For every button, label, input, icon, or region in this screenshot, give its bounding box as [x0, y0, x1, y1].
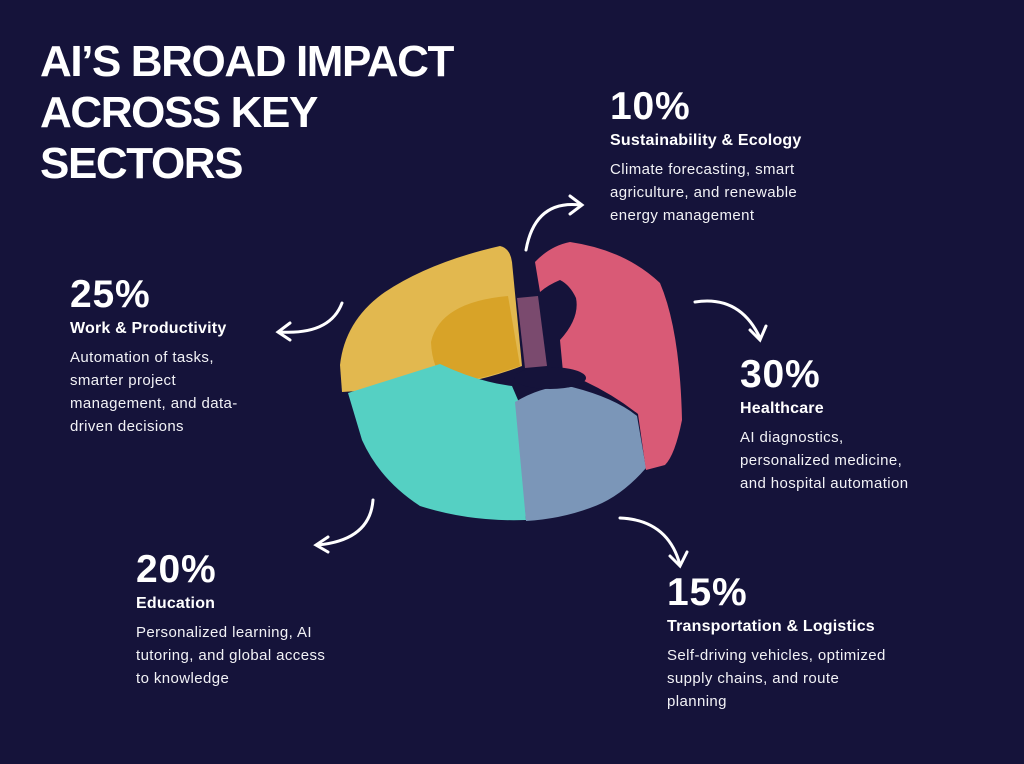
arrow: to healthcare: [695, 301, 766, 340]
block: education: tutoring, and global access: [136, 647, 325, 664]
block: education: Personalized learning, AI: [136, 624, 312, 641]
block: sustainability: Climate forecasting, smart agriculture, and renewable energy management: [610, 161, 797, 224]
title: SECTORS: [40, 139, 242, 188]
block: work: 25%: [70, 273, 150, 316]
arrow: to sustainability: [526, 196, 582, 250]
chart segment: yellow work: [340, 246, 522, 392]
block: education: 20%: [136, 548, 216, 591]
block: sustainability: 10%: [610, 85, 690, 128]
block: education: Education: [136, 595, 215, 612]
block: healthcare: [740, 353, 908, 492]
block: sustainability: Sustainability & Ecology: [610, 132, 802, 149]
chart segment: purple sustainability: [517, 296, 547, 368]
title: [40, 37, 454, 188]
block: healthcare: and hospital automation: [740, 475, 908, 492]
block: healthcare: Healthcare: [740, 400, 824, 417]
block: transport: supply chains, and route: [667, 670, 839, 687]
block: healthcare: AI diagnostics,: [740, 429, 844, 446]
chart segment: teal education: [348, 364, 526, 520]
block: work: management, and data-: [70, 395, 238, 412]
title: ACROSS KEY: [40, 88, 317, 137]
arrow: to transport: [620, 518, 687, 566]
block: work: driven decisions: [70, 418, 184, 435]
block: work: [70, 273, 238, 435]
block: healthcare: 30%: [740, 353, 820, 396]
block: work: Work & Productivity: [70, 320, 226, 337]
block: transport: [667, 571, 886, 710]
block: healthcare: personalized medicine,: [740, 452, 902, 469]
block: transport: planning: [667, 693, 727, 710]
block: education: [136, 548, 325, 687]
block: work: Automation of tasks,: [70, 349, 214, 366]
chart segment: blue transport: [515, 387, 646, 521]
block: education: to knowledge: [136, 670, 229, 687]
title: AI’S BROAD IMPACT: [40, 37, 453, 86]
arrow: to education: [316, 500, 373, 552]
block: sustainability: [610, 85, 802, 224]
block: work: smarter project: [70, 372, 176, 389]
block: transport: 15%: [667, 571, 747, 614]
chart segment: pink healthcare: [535, 242, 682, 470]
block: transport: Transportation & Logistics: [667, 618, 875, 635]
arrow: to work: [278, 303, 342, 340]
block: transport: Self-driving vehicles, optimized: [667, 647, 886, 664]
